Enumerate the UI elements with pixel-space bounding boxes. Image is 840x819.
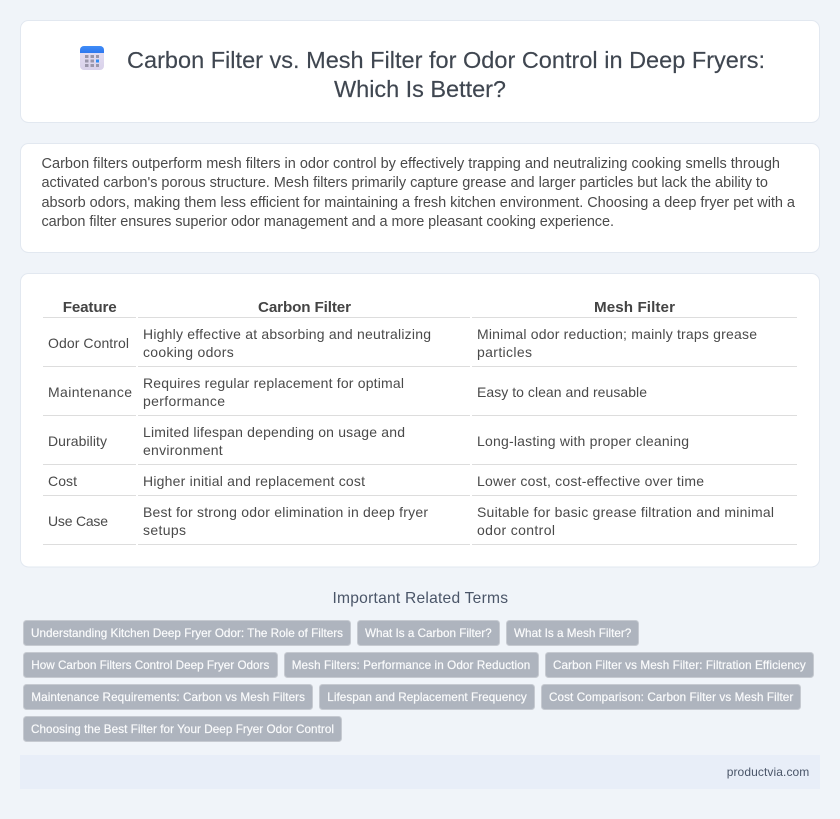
table row: odor control: Odor Control (48, 335, 129, 351)
description text: Carbon filters outperform mesh filters in odor control by effectively trapping and neutralizing cooking smells through (42, 156, 780, 172)
table header row (43, 299, 797, 318)
tag (24, 652, 278, 678)
table row: use case: Suitable for basic grease filtration and minimal (477, 504, 774, 520)
description text: carbon filter ensures superior odor management and a more pleasant cooking experience. (42, 214, 614, 230)
table header row: Carbon Filter (258, 299, 351, 316)
panel: comparison table (20, 274, 820, 567)
tag: What Is a Carbon Filter? (365, 627, 492, 640)
table row: odor control (43, 326, 797, 366)
description text: absorb odors, making them less efficient for maintaining a fresh kitchen environment. Choosing a deep fryer pet with a (42, 195, 796, 211)
table row: cost: Higher initial and replacement cost (143, 473, 365, 489)
table row: use case (43, 504, 797, 544)
table row: maintenance: Requires regular replacement for optimal (143, 375, 404, 391)
tag: Mesh Filters: Performance in Odor Reduction (292, 659, 530, 672)
tag: Understanding Kitchen Deep Fryer Odor: The Role of Filters (31, 627, 343, 640)
tag (284, 652, 538, 678)
footer bar (20, 755, 820, 789)
tag: Lifespan and Replacement Frequency (327, 691, 527, 704)
related term tags (24, 620, 814, 742)
tag (506, 620, 638, 646)
heading: important related terms: Important Related Terms (332, 590, 508, 607)
table row: maintenance (43, 375, 797, 416)
table row: maintenance: Maintenance (48, 384, 132, 400)
table row: odor control: particles (477, 344, 532, 360)
title: Carbon Filter vs. Mesh Filter for Odor Control in Deep Fryers: (127, 47, 765, 73)
table row: maintenance: performance (143, 393, 225, 409)
tag (320, 684, 534, 710)
table row: durability: Limited lifespan depending on usage and (143, 424, 405, 440)
tag: Cost Comparison: Carbon Filter vs Mesh Filter (549, 691, 793, 704)
description text (42, 156, 796, 230)
tag: Maintenance Requirements: Carbon vs Mesh Filters (31, 691, 305, 704)
tag: What Is a Mesh Filter? (514, 627, 632, 640)
tag (24, 620, 350, 646)
tag (24, 716, 342, 742)
table header row: Mesh Filter (594, 299, 675, 316)
panel: description (20, 144, 820, 252)
tag (546, 652, 814, 678)
table row: odor control: Highly effective at absorbing and neutralizing (143, 326, 431, 342)
table row: durability: environment (143, 442, 223, 458)
table row: odor control: Minimal odor reduction; mainly traps grease (477, 326, 757, 342)
description text: activated carbon's porous structure. Mesh filters primarily capture grease and larger particles but lack the ability to (42, 175, 768, 191)
title: Which Is Better? (334, 76, 506, 102)
tag: How Carbon Filters Control Deep Fryer Odors (31, 659, 269, 672)
tag (24, 684, 312, 710)
table header row: Feature (63, 299, 117, 316)
tag: Choosing the Best Filter for Your Deep Fryer Odor Control (31, 723, 334, 736)
table row: durability (43, 424, 797, 464)
table row: use case: setups (143, 522, 186, 538)
tag (358, 620, 500, 646)
table row: cost: Lower cost, cost-effective over time (477, 473, 704, 489)
title (127, 47, 765, 102)
table row: maintenance: Easy to clean and reusable (477, 384, 647, 400)
tag: Carbon Filter vs Mesh Filter: Filtration Efficiency (553, 659, 806, 672)
table row: durability: Durability (48, 433, 107, 449)
table row: use case: Use Case (48, 513, 108, 529)
table row: cost (43, 473, 797, 496)
tag (542, 684, 800, 710)
table row: use case: odor control (477, 522, 555, 538)
table row: odor control: cooking odors (143, 344, 234, 360)
table row: cost: Cost (48, 473, 77, 489)
table row: use case: Best for strong odor elimination in deep fryer (143, 504, 428, 520)
footer source text: productvia.com (727, 765, 809, 779)
panel: title header (20, 20, 820, 122)
icon: calendar (80, 46, 104, 70)
table row: durability: Long-lasting with proper cleaning (477, 433, 689, 449)
